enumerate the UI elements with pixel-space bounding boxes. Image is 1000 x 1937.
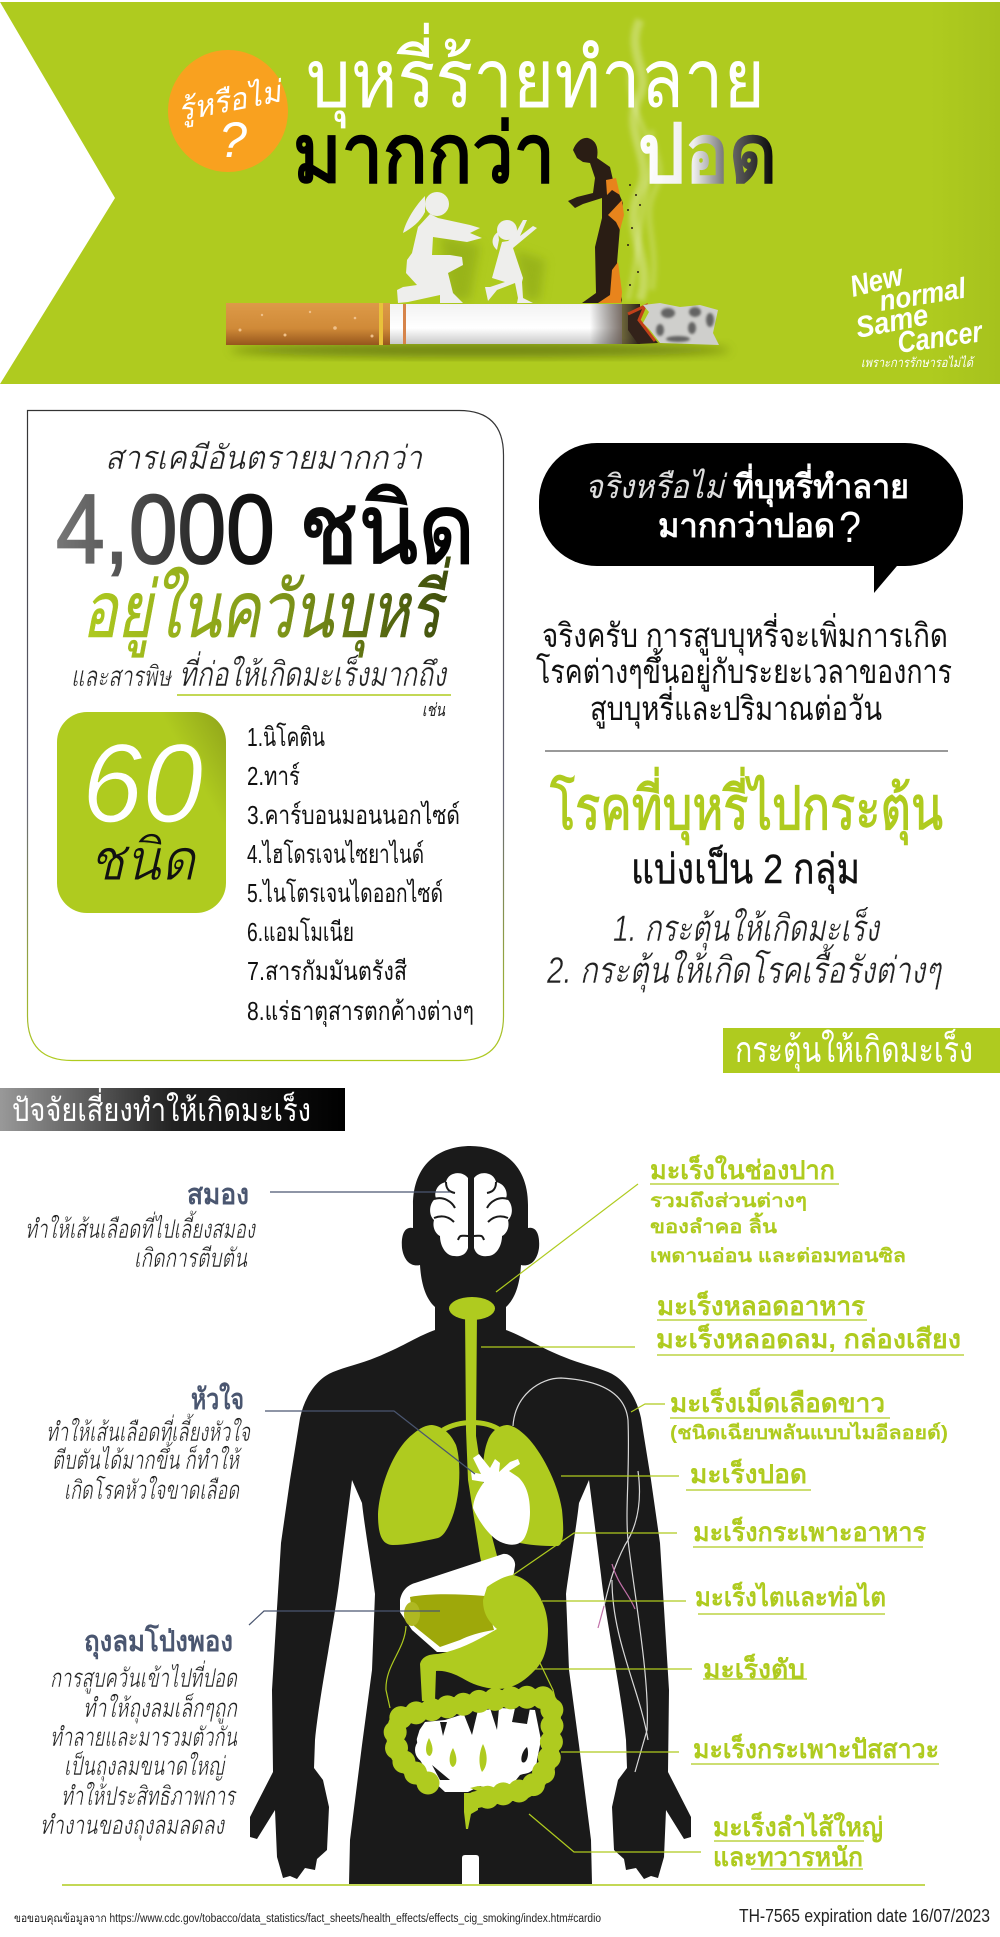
- banner background: [0, 2, 1000, 384]
- label: emphysema: ทำให้ถุงลมเล็กๆถูก: [83, 1692, 238, 1724]
- speech bubble: [539, 443, 963, 593]
- body silhouette: [250, 1146, 691, 1884]
- label: brain: [25, 1179, 257, 1273]
- label: lung cancer: มะเร็งปอด: [690, 1458, 807, 1489]
- rectum: [464, 1793, 478, 1829]
- title line 1: บุหรี่ร้ายทำลาย: [306, 22, 765, 129]
- orange badge: did you know: รู้หรือไม่: [175, 74, 288, 129]
- speech bubble: ที่บุหรี่ทำลาย: [733, 463, 909, 508]
- label: heart: ตีบตันได้มากขึ้น ก็ทำให้: [52, 1441, 243, 1475]
- illustration: girl: [485, 220, 537, 303]
- text block: answer: [536, 613, 952, 729]
- label: mouth cancer: [650, 1154, 906, 1267]
- subheading: two groups: แบ่งเป็น 2 กลุ่ม: [631, 845, 860, 894]
- label: emphysema: [40, 1623, 238, 1841]
- logo: New normal Same Cancer: [847, 259, 986, 370]
- throat and esophagus: [449, 1297, 502, 1590]
- smoke: [628, 20, 660, 300]
- footer: source: ขอขอบคุณข้อมูลจาก https://www.cdc.gov/tobacco/data_statistics/fact_sheets/health_effects/effects_cig_smoking/index.htm#cardio: [14, 1912, 601, 1925]
- text: and toxins: ที่ก่อให้เกิดมะเร็งมากถึง: [179, 651, 448, 694]
- heading: in cigarette smoke: อยู่ในควันบุหรี่: [82, 556, 451, 658]
- label: colorectal cancer: และทวารหนัก: [713, 1842, 863, 1872]
- label: heart: [46, 1382, 251, 1505]
- illustration: man burning: [568, 138, 641, 303]
- label: emphysema: เป็นถุงลมขนาดใหญ่: [64, 1750, 226, 1782]
- label: colorectal cancer: [713, 1811, 883, 1872]
- label: bladder cancer: มะเร็งกระเพาะปัสสาวะ: [693, 1733, 939, 1764]
- panel: chemicals: [28, 410, 504, 1060]
- text: and toxins: และสารพิษ: [71, 661, 172, 692]
- label: leukemia: [670, 1387, 948, 1444]
- label: emphysema: ทำลายและมารวมตัวกัน: [50, 1722, 238, 1752]
- large intestine: [395, 1697, 552, 1800]
- label: mouth cancer: รวมถึงส่วนต่างๆ: [650, 1190, 807, 1212]
- title line 2: [293, 109, 777, 200]
- callout: 60 types: 60: [82, 721, 203, 846]
- label: mouth cancer: มะเร็งในช่องปาก: [650, 1154, 835, 1185]
- label: esophagus, trachea, larynx cancer: มะเร็งหลอดอาหาร: [657, 1290, 865, 1321]
- label: emphysema: ทำงานของถุงลมลดลง: [40, 1810, 226, 1841]
- list: chemicals: 7.สารกัมมันตรังสี: [247, 956, 407, 986]
- figure shadows: [440, 235, 545, 300]
- list: two groups: [546, 906, 943, 993]
- stomach: [420, 1575, 548, 1701]
- speech bubble: จริงหรือไม่: [585, 468, 728, 505]
- label: esophagus, trachea, larynx cancer: มะเร็งหลอดลม, กล่องเสียง: [656, 1323, 961, 1354]
- speech bubble: มากกว่าปอด: [658, 507, 835, 544]
- label: esophagus, trachea, larynx cancer: [656, 1290, 964, 1355]
- text: and toxins: [71, 651, 451, 720]
- list: chemicals: 1.นิโคติน: [247, 722, 325, 752]
- logo: New normal Same Cancer: เพราะการรักษารอไม่ได้: [861, 355, 976, 370]
- speech bubble: ?: [839, 503, 861, 552]
- list: chemicals: 5.ไนโตรเจนไดออกไซด์: [247, 878, 443, 908]
- list: chemicals: 6.แอมโมเนีย: [247, 917, 354, 947]
- label: mouth cancer: ของลำคอ ลิ้น: [650, 1212, 777, 1238]
- callout: 60 types: [57, 712, 226, 913]
- callout: 60 types: ชนิด: [89, 828, 198, 893]
- big number: 4,000 types: 4,000 ชนิด: [56, 474, 475, 584]
- illustration: woman kneeling: [397, 192, 482, 303]
- orange badge: did you know: [168, 50, 288, 172]
- connector lines: [62, 1184, 925, 1885]
- label: stomach cancer: มะเร็งกระเพาะอาหาร: [693, 1516, 926, 1547]
- logo: New normal Same Cancer: Same: [853, 299, 931, 345]
- label: brain: ทำให้เส้นเลือดที่ไปเลี้ยงสมอง: [25, 1210, 257, 1244]
- title line 2: มากกว่า: [293, 109, 555, 200]
- label: heart: ทำให้เส้นเลือดที่เลี้ยงหัวใจ: [46, 1413, 251, 1447]
- label: emphysema: การสูบควันเข้าไปที่ปอด: [50, 1660, 238, 1694]
- orange badge: did you know: ?: [219, 112, 247, 168]
- tab: risk factors: ปัจจัยเสี่ยงทำให้เกิดมะเร็ง: [12, 1088, 311, 1128]
- heading: more than: สารเคมีอันตรายมากกว่า: [105, 439, 423, 476]
- liver: [400, 1554, 515, 1652]
- list: chemicals: [247, 722, 474, 1027]
- logo: New normal Same Cancer: Cancer: [895, 315, 986, 360]
- list: chemicals: 2.ทาร์: [247, 761, 300, 791]
- label: mouth cancer: เพดานอ่อน และต่อมทอนซิล: [650, 1246, 906, 1267]
- cigarette: [226, 303, 730, 357]
- logo: New normal Same Cancer: New: [847, 259, 908, 304]
- text block: answer: สูบบุหรี่และปริมาณต่อวัน: [590, 686, 882, 729]
- list: chemicals: 8.แร่ธาตุสารตกค้างต่างๆ: [247, 996, 474, 1027]
- label: brain: เกิดการตีบตัน: [134, 1243, 248, 1273]
- label: colorectal cancer: มะเร็งลำไส้ใหญ่: [713, 1811, 883, 1843]
- logo: New normal Same Cancer: normal: [877, 273, 969, 318]
- icon: heart: [471, 1454, 530, 1545]
- lungs: [378, 1422, 563, 1546]
- label: brain: สมอง: [187, 1179, 249, 1211]
- title line 2: ปอด: [638, 109, 777, 200]
- list: chemicals: 3.คาร์บอนมอนนอกไซด์: [247, 800, 460, 830]
- label: emphysema: ทำให้ประสิทธิภาพการ: [61, 1781, 237, 1811]
- list: chemicals: 4.ไฮโดรเจนไซยาไนด์: [247, 839, 424, 869]
- text: and toxins: เช่น: [422, 700, 446, 720]
- label: leukemia: มะเร็งเม็ดเลือดขาว: [670, 1387, 885, 1418]
- label: liver cancer: มะเร็งตับ: [703, 1653, 805, 1684]
- label: heart: เกิดโรคหัวใจขาดเลือด: [64, 1475, 240, 1505]
- small intestine: [414, 1708, 541, 1792]
- label: heart: หัวใจ: [191, 1382, 244, 1416]
- label: emphysema: ถุงลมโป่งพอง: [84, 1623, 233, 1659]
- label: kidney cancer: มะเร็งไตและท่อไต: [695, 1581, 886, 1612]
- vessels: [386, 1378, 648, 1772]
- icon: brain: [430, 1173, 512, 1256]
- label: leukemia: (ชนิดเฉียบพลันแบบไมอีลอยด์): [670, 1421, 948, 1444]
- body diagram: [250, 1146, 691, 1884]
- list: two groups: 1. กระตุ้นให้เกิดมะเร็ง: [613, 906, 881, 951]
- banner header group: [168, 22, 777, 200]
